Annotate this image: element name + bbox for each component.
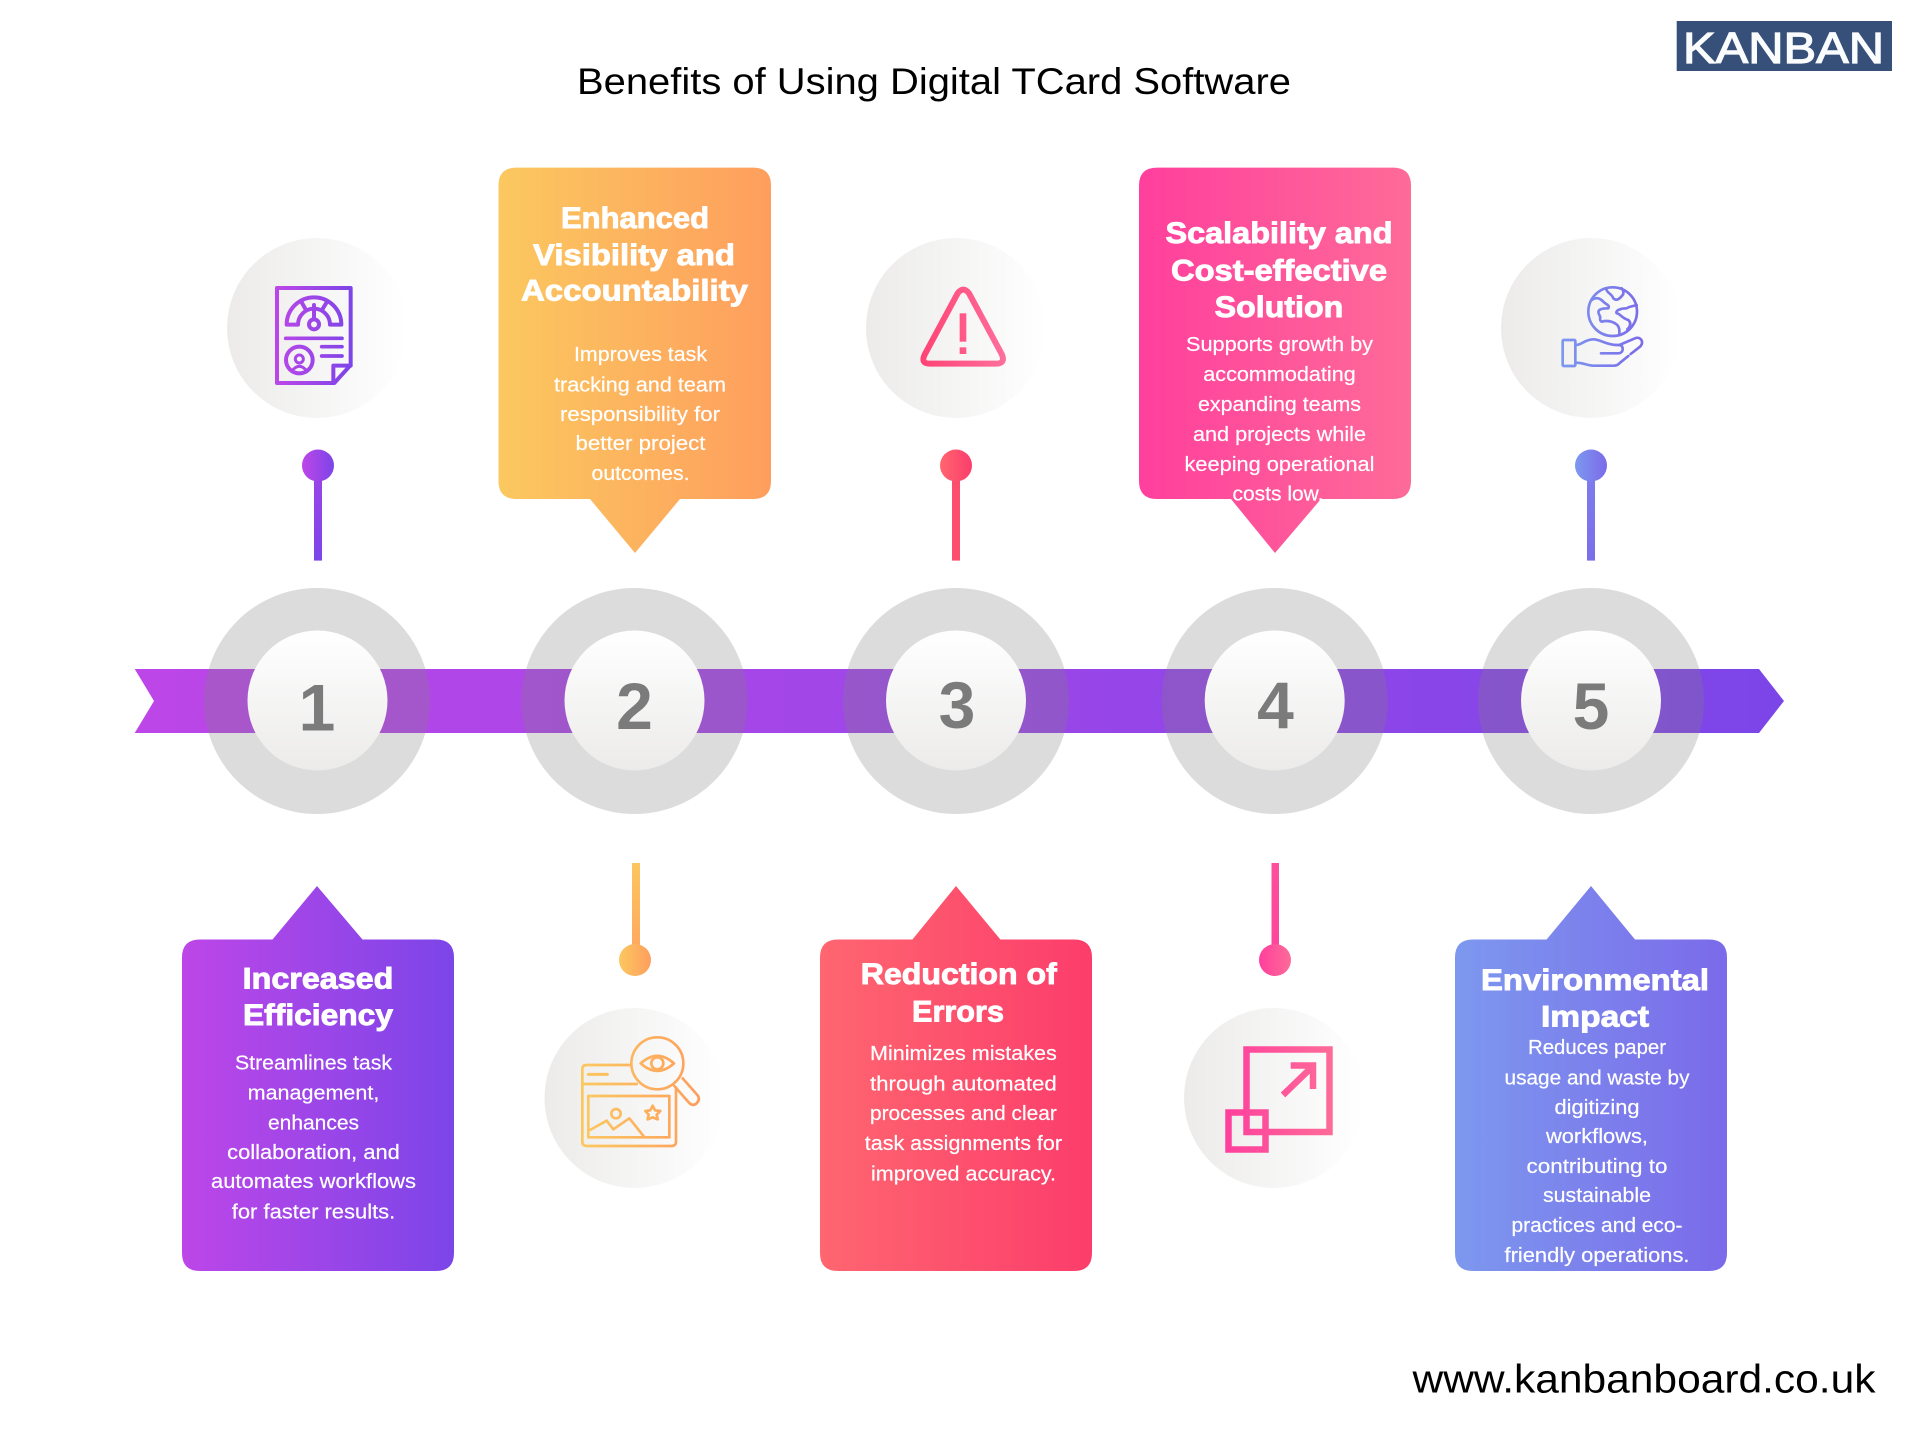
- icon: warning triangle: [866, 238, 1046, 418]
- website url: www.kanbanboard.co.uk: [1411, 1358, 1877, 1402]
- body text: contributing to: [1526, 1156, 1668, 1178]
- panel: Increased Efficiency: [182, 886, 454, 1271]
- heading: [243, 963, 393, 1032]
- icon: expand squares: [1184, 1008, 1364, 1188]
- pin 1: [302, 450, 334, 561]
- heading: Impact: [1541, 1000, 1649, 1034]
- body text: sustainable: [1543, 1185, 1651, 1207]
- heading: Visibility and: [533, 239, 735, 272]
- body text: [554, 344, 726, 485]
- panel: Reduction of Errors: [820, 886, 1092, 1271]
- step 1 marker: [204, 588, 430, 814]
- heading: Reduction of: [861, 958, 1058, 991]
- heading: Enhanced: [561, 202, 709, 235]
- step 4 marker: 4: [1257, 668, 1294, 742]
- pin 5: [1575, 450, 1607, 561]
- body text: Supports growth by: [1186, 334, 1373, 356]
- body text: expanding teams: [1198, 394, 1361, 416]
- body text: for faster results.: [232, 1202, 395, 1224]
- step 3 marker: [843, 588, 1069, 814]
- heading: Cost-effective: [1171, 254, 1387, 288]
- step 5 marker: [1478, 588, 1704, 814]
- body text: [211, 1052, 416, 1224]
- heading: [1166, 217, 1392, 324]
- body text: keeping operational: [1184, 454, 1374, 476]
- heading: [1481, 964, 1709, 1034]
- step 3 marker: 3: [939, 668, 975, 742]
- panel: Enhanced Visibility and Accountability: [498, 168, 771, 553]
- body text: task assignments for: [865, 1133, 1062, 1155]
- body text: friendly operations.: [1504, 1245, 1690, 1267]
- timeline arrow: [135, 669, 1784, 733]
- icon: browser with magnifier: [544, 1008, 724, 1188]
- body text: enhances: [268, 1112, 359, 1134]
- heading: Solution: [1215, 291, 1343, 324]
- step 1 marker: 1: [299, 670, 335, 744]
- step 5 marker: 5: [1573, 669, 1609, 743]
- heading: Errors: [912, 996, 1004, 1028]
- body text: Minimizes mistakes: [870, 1043, 1057, 1065]
- icon: gauge report document: [227, 238, 407, 418]
- pin 3: [940, 450, 972, 561]
- body text: practices and eco-: [1512, 1215, 1682, 1237]
- body text: workflows,: [1545, 1126, 1648, 1148]
- body text: and projects while: [1193, 424, 1366, 446]
- body text: responsibility for: [560, 404, 720, 426]
- step 4 marker: [1162, 588, 1388, 814]
- body text: through automated: [870, 1074, 1057, 1096]
- body text: digitizing: [1554, 1097, 1640, 1119]
- body text: management,: [248, 1082, 379, 1104]
- pin 2: [619, 863, 651, 976]
- icon: globe in hand: [1501, 238, 1681, 418]
- pin 4: [1259, 863, 1291, 976]
- title: Benefits of Using Digital TCard Software: [577, 60, 1291, 102]
- heading: Environmental: [1481, 964, 1709, 997]
- body text: Improves task: [574, 344, 708, 366]
- heading: Increased: [243, 963, 393, 996]
- body text: processes and clear: [870, 1103, 1057, 1125]
- heading: Scalability and: [1166, 217, 1392, 250]
- body text: [865, 1043, 1062, 1186]
- body text: automates workflows: [211, 1171, 416, 1193]
- heading: [521, 202, 748, 308]
- body text: better project: [576, 433, 706, 455]
- body text: [1504, 1037, 1690, 1267]
- body text: collaboration, and: [227, 1142, 400, 1164]
- body text: improved accuracy.: [871, 1164, 1056, 1186]
- body text: tracking and team: [554, 375, 726, 397]
- panel: Environmental Impact: [1455, 886, 1727, 1271]
- heading: Accountability: [521, 275, 748, 308]
- panel: Scalability and Cost-effective Solution: [1139, 168, 1411, 553]
- heading: [861, 958, 1058, 1028]
- body text: Streamlines task: [235, 1052, 393, 1074]
- body text: outcomes.: [592, 463, 690, 485]
- step 2 marker: 2: [616, 669, 653, 743]
- body text: accommodating: [1203, 364, 1356, 386]
- logo: KANBAN: KANBAN: [1683, 24, 1884, 73]
- body text: Reduces paper: [1528, 1037, 1666, 1059]
- heading: Efficiency: [243, 999, 393, 1032]
- step 2 marker: [522, 588, 748, 814]
- body text: costs low.: [1232, 484, 1324, 506]
- body text: usage and waste by: [1504, 1068, 1690, 1090]
- body text: [1184, 334, 1374, 506]
